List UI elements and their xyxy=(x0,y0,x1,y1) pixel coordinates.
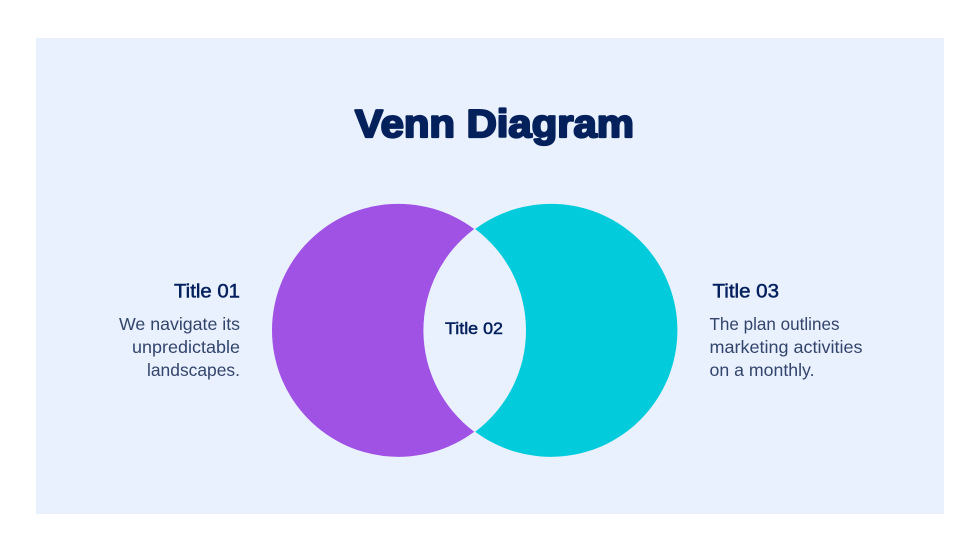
heading: title 03: Title 03 xyxy=(712,280,779,302)
body: right description xyxy=(710,314,863,380)
body: left description: landscapes. xyxy=(147,360,240,380)
body: left description: unpredictable xyxy=(132,337,240,357)
body: right description: marketing activities xyxy=(710,337,863,357)
label: title 02: Title 02 xyxy=(445,320,503,338)
body: right description: on a monthly. xyxy=(710,360,814,380)
circle: left purple crescent xyxy=(272,204,474,457)
text block: left xyxy=(119,280,240,380)
body: left description xyxy=(119,314,240,380)
title: Venn Diagram xyxy=(355,103,634,146)
venn diagram xyxy=(272,204,677,457)
body: left description: We navigate its xyxy=(119,314,240,334)
circle: right teal crescent xyxy=(475,204,677,457)
body: right description: The plan outlines xyxy=(710,314,840,334)
text block: right xyxy=(710,280,863,380)
heading: title 01: Title 01 xyxy=(174,280,240,302)
